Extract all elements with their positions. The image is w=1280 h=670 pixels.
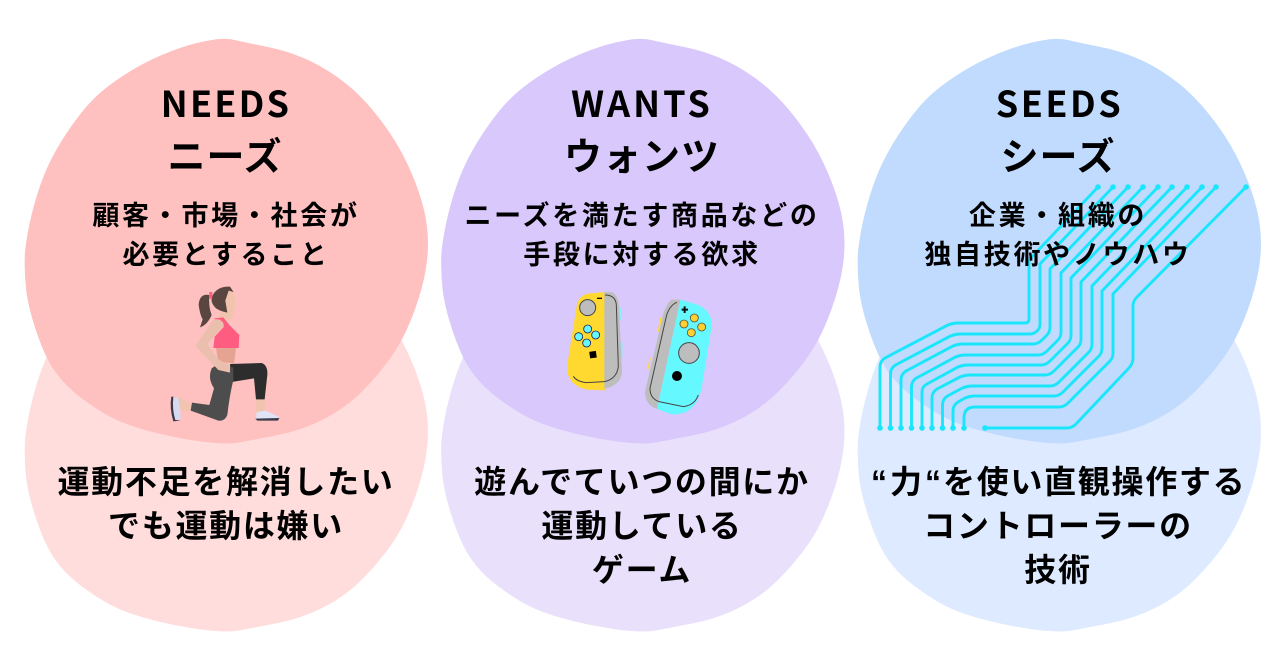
description: needs: 顧客・市場・社会が [92, 200, 360, 231]
lower blob: wants [441, 227, 844, 631]
body text: needs example: 運動不足を解消したい [57, 464, 395, 500]
description: seeds: 独自技術やノウハウ [924, 240, 1192, 270]
description: wants: 手段に対する欲求 [523, 240, 761, 270]
panel: needs [25, 39, 428, 631]
circuit lines [877, 184, 1249, 431]
description: seeds [924, 201, 1192, 270]
body text: wants example: 運動している [541, 508, 743, 544]
icon: game controllers [567, 292, 712, 414]
heading: WANTS: WANTS [571, 76, 713, 128]
heading: wants katakana: ウォンツ [564, 137, 720, 179]
body text: seeds example: “ [925, 464, 943, 500]
heading: NEEDS: NEEDS [161, 76, 291, 128]
body text: wants example [474, 464, 810, 588]
body text: needs example: でも運動は嫌い [108, 508, 344, 544]
body text: seeds example: 力 [890, 464, 924, 500]
description: seeds: 企業・組織の [969, 201, 1147, 231]
heading: needs katakana: ニーズ [167, 136, 283, 179]
upper blob: wants [441, 39, 844, 443]
panel: seeds [858, 39, 1261, 631]
upper blob: seeds [858, 39, 1261, 443]
body text: wants example: 遊んでていつの間にか [474, 464, 810, 500]
heading: seeds katakana: シーズ [1000, 136, 1116, 179]
body text: wants example: ゲーム [592, 552, 692, 588]
body text: seeds example: を使い直観操作する [943, 464, 1246, 500]
heading: SEEDS: SEEDS [996, 76, 1123, 128]
body text: needs example [57, 464, 395, 544]
body text: seeds example: “ [871, 464, 889, 500]
description: needs [92, 200, 360, 270]
body text: seeds example: 技術 [1024, 552, 1092, 588]
upper blob: needs [25, 39, 428, 443]
description: needs: 必要とすること [122, 240, 330, 270]
description: wants: ニーズを満たす商品などの [464, 200, 820, 231]
lower blob: needs [25, 227, 428, 631]
body text: seeds example [871, 464, 1246, 588]
body text: seeds example: コントローラーの [923, 508, 1193, 544]
description: wants [464, 200, 820, 270]
lower blob: seeds [858, 227, 1261, 631]
icon: lunging woman [171, 287, 279, 421]
panel: wants [441, 39, 844, 631]
